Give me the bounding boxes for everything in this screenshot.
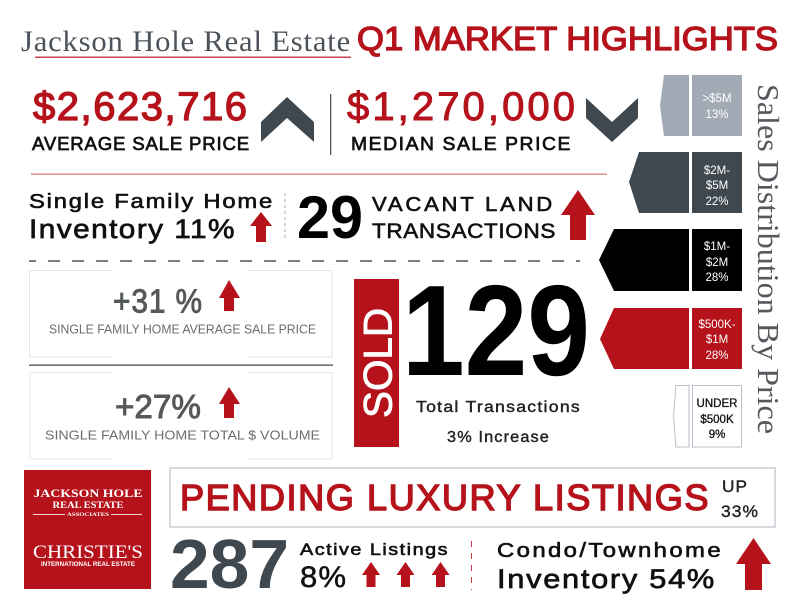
- icon: up arrow: [250, 212, 272, 242]
- logo: [24, 470, 151, 589]
- panel: pending luxury listings: [170, 468, 775, 527]
- bar: 1M to 2M: [599, 229, 742, 291]
- single family home inventory: Single Family Home: [29, 191, 274, 213]
- vacant land transactions: TRANSACTIONS: [372, 220, 556, 243]
- bar: under 500K: [674, 386, 742, 447]
- bar: 1M to 2M: 28%: [705, 272, 729, 284]
- active listings: Active Listings: [300, 540, 449, 559]
- total transactions: [402, 259, 590, 446]
- bar: 2M to 5M: [629, 152, 742, 213]
- panel: average sale price change: [30, 270, 332, 357]
- median sale price: MEDIAN SALE PRICE: [351, 133, 572, 154]
- active listings: [170, 525, 450, 603]
- bar: 2M to 5M: 22%: [705, 196, 729, 208]
- condo townhome inventory: Condo/Townhome: [497, 540, 723, 562]
- bar: under 500K: UNDER: [697, 398, 737, 410]
- bar: 500K to 1M: $500K-: [698, 319, 736, 331]
- total transactions: Total Transactions: [416, 399, 581, 416]
- logo: CHRISTIE'S: [33, 542, 143, 563]
- logo: ASSOCIATES: [67, 513, 109, 518]
- bar: 500K to 1M: $1M: [706, 334, 728, 346]
- bar: 2M to 5M: $5M: [706, 180, 728, 192]
- vacant land transactions: VACANT LAND: [372, 194, 555, 216]
- title: Jackson Hole Real Estate: [21, 25, 351, 58]
- bar: over 5M: 13%: [705, 109, 729, 121]
- single family home inventory: [29, 191, 274, 244]
- single family home inventory: Inventory 11%: [29, 214, 236, 244]
- condo townhome inventory: Inventory 54%: [497, 564, 716, 594]
- bar: 1M to 2M: $2M: [706, 257, 728, 269]
- bar: 1M to 2M: $1M-: [704, 241, 730, 253]
- bar: 500K to 1M: [600, 308, 742, 369]
- panel: pending luxury listings: PENDING LUXURY LISTINGS: [180, 477, 710, 518]
- title: Q1 MARKET HIGHLIGHTS: [357, 20, 778, 57]
- sold badge: SOLD: [356, 308, 400, 418]
- heading: sales distribution by price: Sales Distribution By Price: [751, 84, 786, 434]
- vacant land transactions: 29: [297, 184, 363, 251]
- panel: total volume change: [30, 372, 332, 459]
- logo: REAL ESTATE: [52, 501, 124, 511]
- average sale price: $2,623,716: [33, 85, 247, 129]
- active listings: 8%: [300, 561, 347, 594]
- median sale price: $1,270,000: [347, 85, 575, 129]
- icon: up arrow: [561, 190, 595, 240]
- icon: up arrow: [219, 280, 240, 311]
- logo: INTERNATIONAL REAL ESTATE: [41, 562, 135, 568]
- average sale price: [32, 85, 250, 154]
- median sale price: [347, 85, 575, 154]
- bar: 500K to 1M: 28%: [705, 350, 729, 362]
- total transactions: 3% Increase: [447, 429, 550, 446]
- panel: pending luxury listings: UP: [722, 477, 748, 496]
- icon: chevron up: [261, 97, 314, 142]
- panel: average sale price change: SINGLE FAMILY HOME AVERAGE SALE PRICE: [49, 322, 316, 336]
- bar: 2M to 5M: $2M-: [704, 165, 730, 177]
- icon: up arrow: [396, 562, 414, 587]
- total transactions: 129: [402, 259, 590, 403]
- bar: under 500K: 9%: [709, 429, 725, 441]
- active listings: 287: [170, 525, 289, 603]
- icon: up arrow: [736, 538, 771, 590]
- icon: up arrow: [432, 562, 450, 587]
- bar: under 500K: $500K: [700, 414, 734, 426]
- icon: chevron down: [586, 98, 638, 142]
- panel: pending luxury listings: 33%: [721, 502, 759, 521]
- title: [21, 20, 778, 58]
- average sale price: AVERAGE SALE PRICE: [32, 133, 250, 154]
- logo: JACKSON HOLE: [34, 486, 142, 500]
- vacant land transactions: [297, 184, 595, 251]
- condo townhome inventory: [497, 538, 771, 594]
- icon: up arrow: [219, 387, 240, 418]
- bar: over 5M: >$5M: [702, 93, 732, 105]
- panel: average sale price change: +31 %: [113, 282, 203, 320]
- bar: over 5M: [660, 75, 742, 136]
- icon: up arrow: [362, 562, 380, 587]
- sold badge: [354, 279, 400, 447]
- panel: total volume change: SINGLE FAMILY HOME TOTAL $ VOLUME: [45, 428, 320, 442]
- panel: total volume change: +27%: [115, 388, 201, 425]
